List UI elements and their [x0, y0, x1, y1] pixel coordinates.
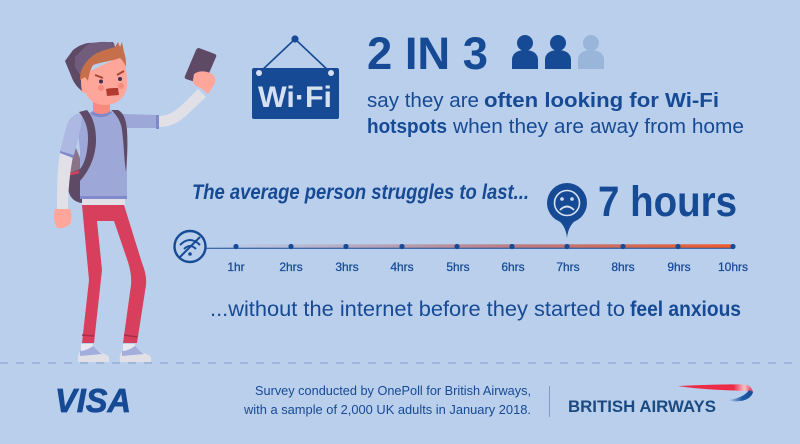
text: Wi-Fi hotspot statistic — [367, 90, 744, 138]
raised hand — [193, 71, 215, 94]
timeline chart: 1hr to 10hrs: 3hrs — [335, 260, 359, 274]
sweater collar and cuffs — [60, 111, 159, 199]
heading: the average person struggles: The average person struggles to last... — [192, 181, 529, 204]
head — [65, 42, 127, 105]
text: without the internet: feel anxious — [630, 298, 741, 321]
text: Wi-Fi hotspot statistic: say they are — [367, 90, 479, 112]
text: survey source — [243, 383, 531, 417]
illustration: frustrated man holding up phone — [54, 42, 216, 362]
heading: 7 hours: 7 hours — [598, 178, 737, 226]
raised arm undersleeve — [158, 89, 206, 127]
phone — [185, 48, 216, 85]
icon: three people, two highlighted — [512, 35, 604, 69]
text: Wi-Fi hotspot statistic: when they are away from home — [452, 116, 744, 138]
left arm sleeve — [57, 153, 73, 209]
icon: Wi-Fi hanging sign: Wi·Fi — [258, 81, 332, 114]
backpack — [68, 143, 84, 203]
timeline chart: 1hr to 10hrs: 9hrs — [667, 260, 691, 274]
timeline chart: 1hr to 10hrs: 4hrs — [390, 260, 414, 274]
timeline chart: 1hr to 10hrs: 5hrs — [446, 260, 470, 274]
logo: Visa: VISA — [55, 382, 131, 419]
sweater — [76, 112, 158, 198]
left sleeve — [60, 113, 82, 155]
angry face — [95, 71, 124, 96]
icon: Wi-Fi hanging sign — [252, 35, 339, 119]
hair — [80, 42, 126, 81]
neck — [93, 98, 110, 116]
timeline chart: 1hr to 10hrs — [205, 244, 748, 274]
logo: British Airways — [568, 384, 753, 416]
timeline chart: 1hr to 10hrs: 8hrs — [611, 260, 635, 274]
text: Wi-Fi hotspot statistic: often looking for Wi-Fi — [484, 90, 719, 112]
text: survey source: Survey conducted by OnePoll for British Airways, — [255, 383, 531, 398]
timeline chart: 1hr to 10hrs: 1hr — [227, 260, 245, 274]
undershirt hem — [82, 199, 125, 205]
text: without the internet: ...without the internet before they started to — [210, 298, 625, 321]
text: survey source: with a sample of 2,000 UK adults in January 2018. — [243, 402, 531, 417]
trousers — [82, 205, 146, 343]
logo: British Airways: BRITISH AIRWAYS — [568, 398, 716, 416]
left hand — [54, 209, 72, 228]
timeline chart: 1hr to 10hrs: 10hrs — [718, 260, 748, 274]
right shoe — [120, 344, 151, 362]
timeline chart: 1hr to 10hrs: 7hrs — [556, 260, 580, 274]
backpack straps — [79, 110, 127, 181]
timeline chart: 1hr to 10hrs: 6hrs — [501, 260, 525, 274]
timeline chart: 1hr to 10hrs: 2hrs — [279, 260, 303, 274]
left shoe — [78, 344, 109, 362]
icon: sad face map pin — [547, 183, 587, 238]
icon: no Wi-Fi — [174, 231, 206, 262]
beanie — [65, 42, 115, 91]
heading: 2 IN 3: 2 IN 3 — [367, 28, 488, 79]
text: Wi-Fi hotspot statistic: hotspots — [367, 116, 447, 138]
